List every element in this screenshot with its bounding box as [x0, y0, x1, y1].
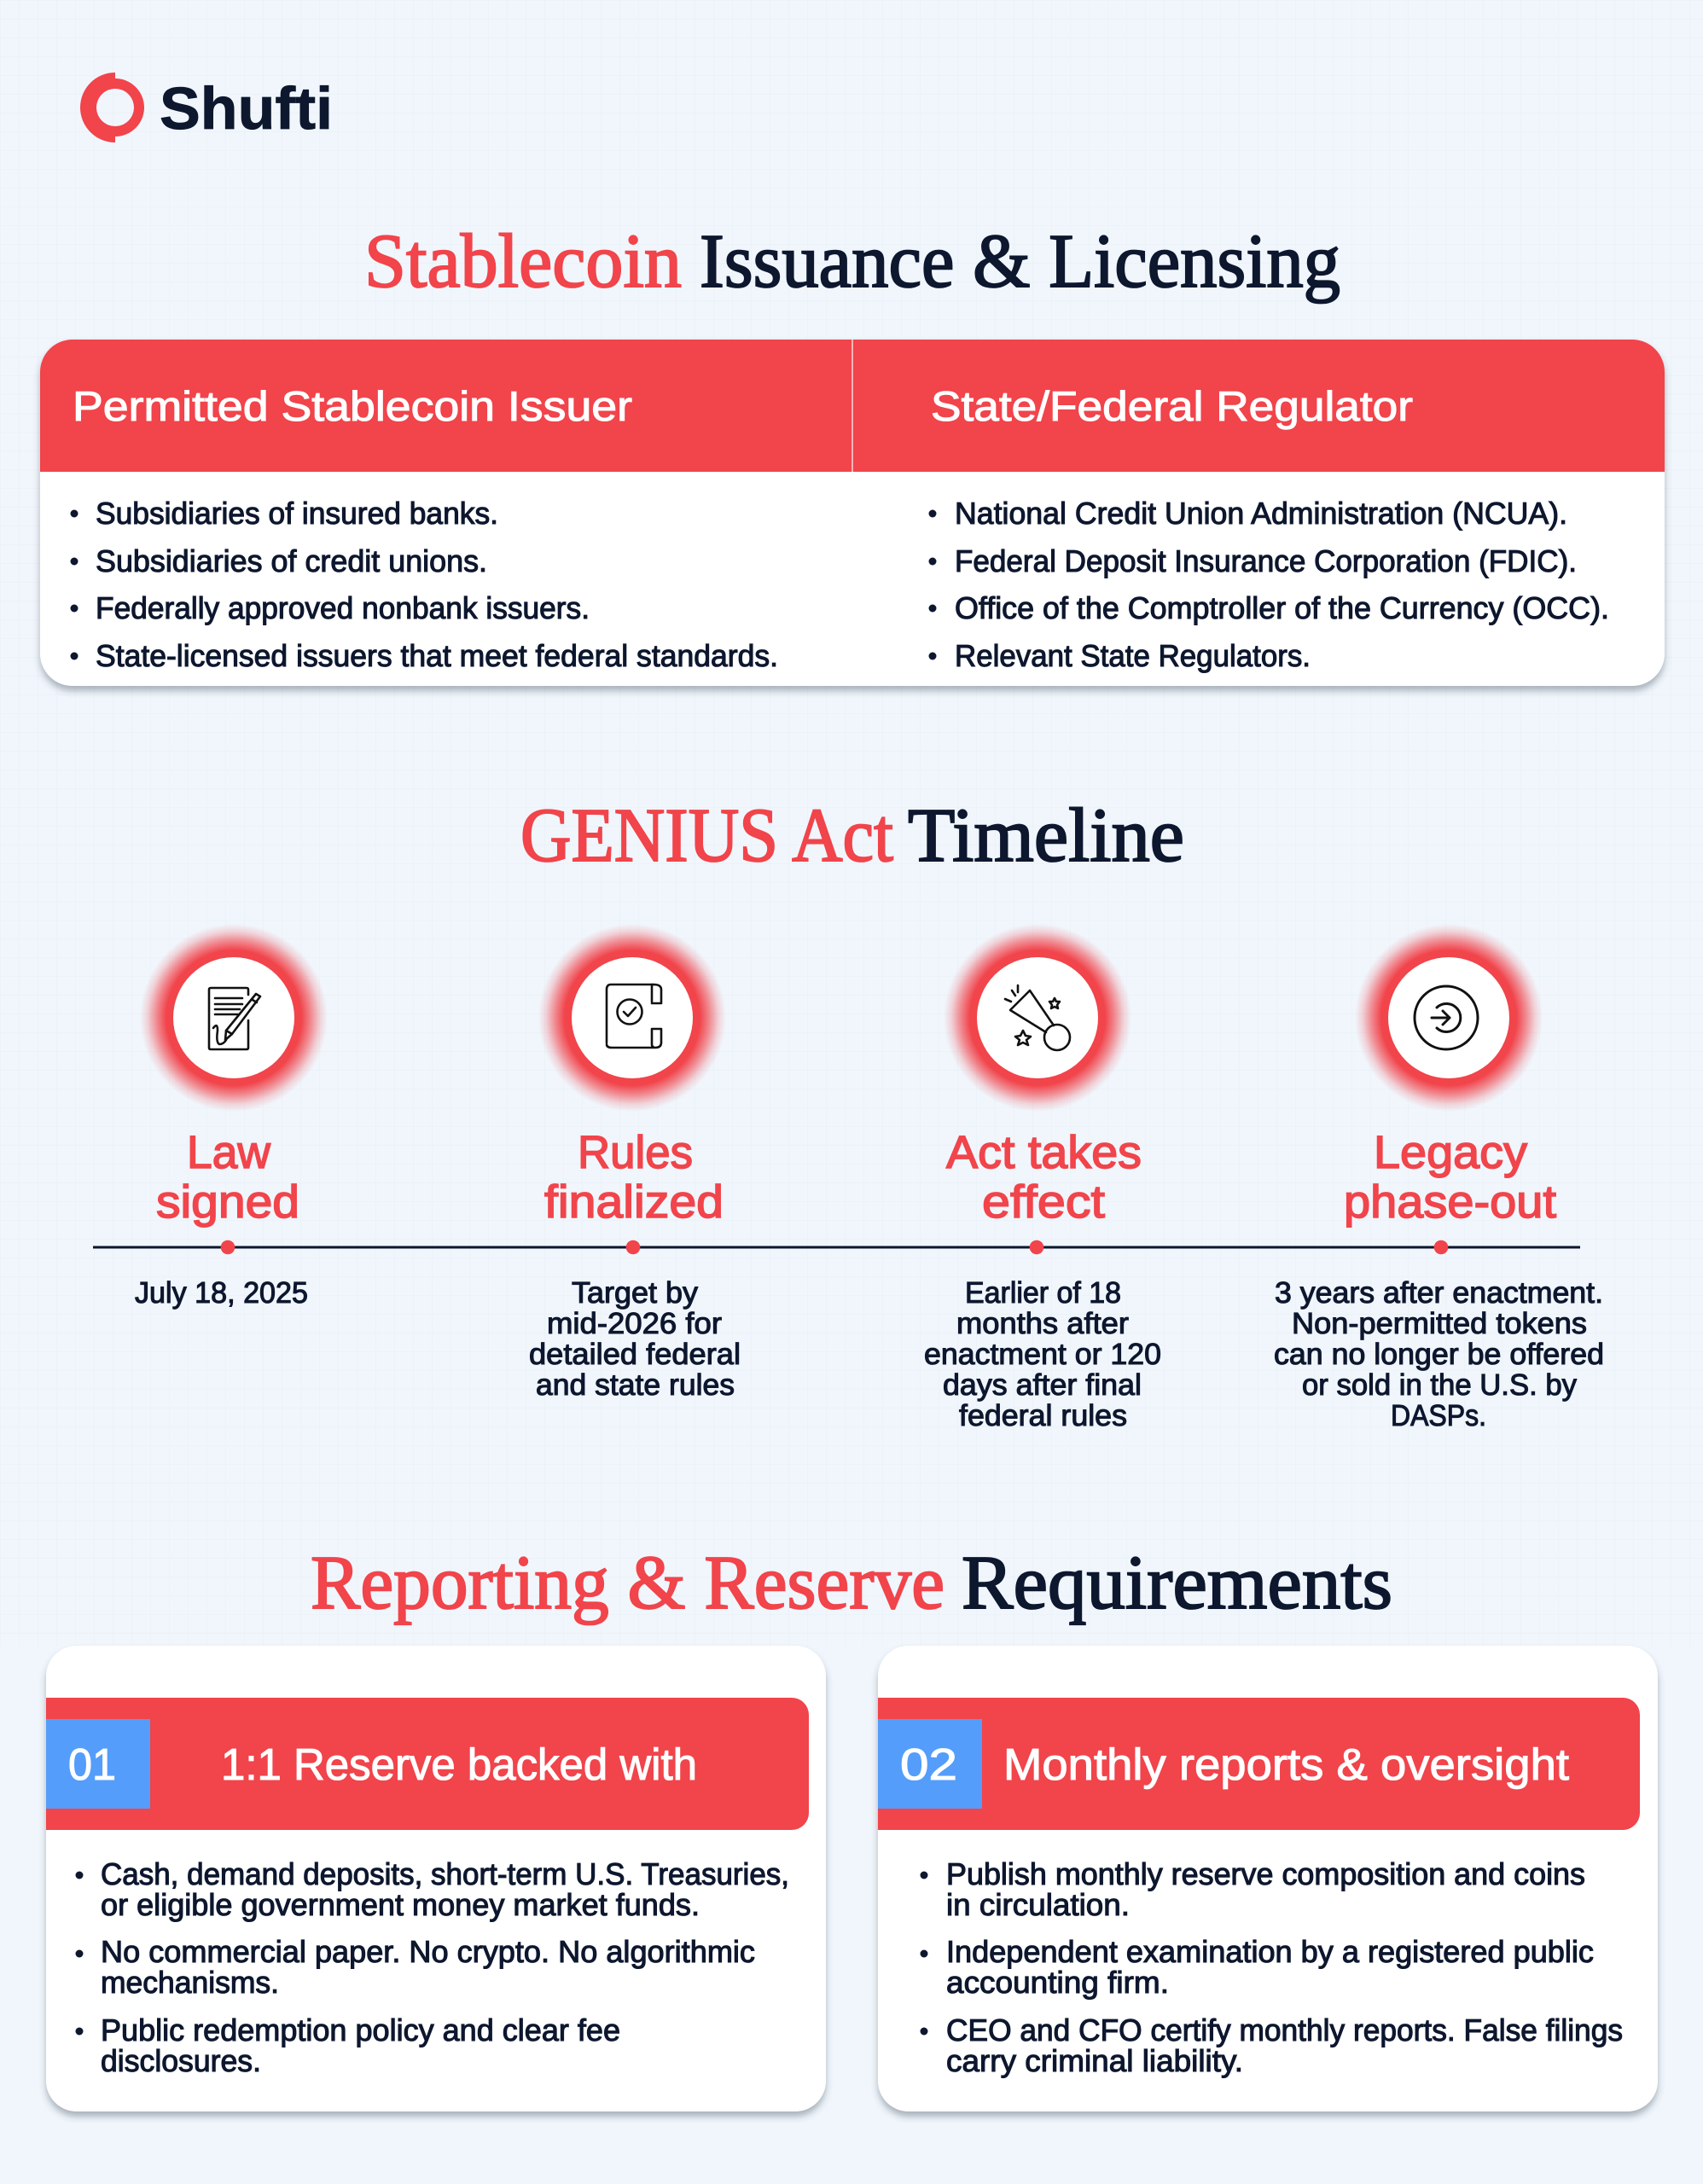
description text: 3 years after enactment. [1275, 1276, 1603, 1310]
list: regulators [928, 496, 1609, 673]
description text: months after [956, 1307, 1129, 1340]
icon: scroll with check [538, 924, 726, 1112]
description text: detailed federal [529, 1338, 741, 1371]
description text: Non-permitted tokens [1292, 1307, 1587, 1340]
heading: Reporting & Reserve Requirements: Reporting & Reserve [311, 1541, 944, 1625]
card header bar [878, 1698, 1640, 1830]
description text [924, 1276, 1161, 1432]
panel: 01 reserve requirements [46, 1646, 826, 2111]
label [544, 1127, 724, 1228]
list: permitted issuers: Subsidiaries of credit unions. [96, 543, 487, 578]
description text: Earlier of 18 [965, 1276, 1121, 1310]
column header: State/Federal Regulator: State/Federal Regulator [931, 384, 1413, 430]
milestone: Act takes effect [924, 924, 1161, 1432]
reports bullet list: CEO and CFO certify monthly reports. False filings [946, 2013, 1623, 2048]
description text: federal rules [959, 1399, 1127, 1432]
description text: or sold in the U.S. by [1302, 1368, 1577, 1402]
description text [529, 1276, 741, 1402]
icon: Shufti ring mark [80, 73, 144, 142]
heading: GENIUS Act Timeline [520, 793, 1184, 878]
column header: Permitted Stablecoin Issuer: Permitted Stablecoin Issuer [73, 384, 632, 430]
number badge 02 [878, 1719, 982, 1809]
number badge 02: 02 [900, 1740, 957, 1790]
reports bullet list: accounting firm. [946, 1965, 1169, 2000]
description text: and state rules [536, 1368, 735, 1402]
label: Law [187, 1127, 271, 1178]
timeline axis with markers [93, 1240, 1580, 1254]
reserve bullet list: or eligible government money market funds. [101, 1887, 700, 1922]
icon: signed document [140, 924, 328, 1112]
description text: Target by [572, 1276, 699, 1310]
list: permitted issuers: Federally approved nonbank issuers. [96, 590, 590, 625]
label: effect [982, 1176, 1105, 1228]
reserve bullet list: Cash, demand deposits, short-term U.S. Treasuries, [101, 1856, 789, 1891]
heading: Reporting & Reserve Requirements: Requirements [962, 1541, 1392, 1625]
description text: enactment or 120 [924, 1338, 1161, 1371]
label: phase-out [1344, 1176, 1556, 1228]
date text: July 18, 2025 [135, 1276, 308, 1310]
reserve bullet list: mechanisms. [101, 1965, 279, 2000]
milestone: Rules finalized [529, 924, 741, 1402]
heading: GENIUS Act Timeline: Timeline [908, 793, 1184, 878]
panel: issuer and regulator table [40, 340, 1665, 686]
label [946, 1127, 1142, 1228]
reserve bullet list: Public redemption policy and clear fee [101, 2013, 620, 2048]
reports bullet list: carry criminal liability. [946, 2043, 1243, 2078]
milestone: Legacy phase-out [1274, 924, 1604, 1432]
reports bullet list: Independent examination by a registered public [946, 1934, 1594, 1969]
reserve bullet list: disclosures. [101, 2043, 261, 2078]
list: regulators: Relevant State Regulators. [955, 638, 1311, 673]
label: finalized [544, 1176, 724, 1228]
list: permitted issuers: Subsidiaries of insured banks. [96, 496, 498, 531]
list: permitted issuers [70, 496, 778, 673]
list: permitted issuers: State-licensed issuers that meet federal standards. [96, 638, 778, 673]
label [1344, 1127, 1556, 1228]
heading: Stablecoin Issuance & Licensing [364, 219, 1340, 304]
list: regulators: National Credit Union Administration (NCUA). [955, 496, 1567, 531]
icon: party popper [944, 924, 1131, 1112]
label [156, 1127, 299, 1228]
reserve bullet list: No commercial paper. No crypto. No algorithmic [101, 1934, 755, 1969]
description text: DASPs. [1391, 1399, 1486, 1432]
label: Rules [578, 1127, 693, 1178]
label: Act takes [946, 1127, 1142, 1178]
heading: Reporting & Reserve Requirements [311, 1541, 1392, 1625]
label: signed [156, 1176, 299, 1228]
reserve bullet list [75, 1856, 789, 2078]
heading: Stablecoin Issuance & Licensing: Issuance & Licensing [700, 219, 1340, 304]
card title: Monthly reports & oversight [1003, 1740, 1570, 1790]
icon: circled entry arrow [1355, 924, 1543, 1112]
card title: 1:1 Reserve backed with [221, 1740, 697, 1790]
number badge 01 [46, 1719, 150, 1809]
logo: Shufti [80, 73, 333, 142]
reports bullet list: Publish monthly reserve composition and coins [946, 1856, 1585, 1891]
timeline [93, 924, 1604, 1432]
panel: 02 monthly reports [878, 1646, 1658, 2111]
number badge 01: 01 [68, 1740, 116, 1790]
wordmark: Shufti [160, 75, 333, 142]
list: regulators: Federal Deposit Insurance Corporation (FDIC). [955, 543, 1577, 578]
milestone: Law signed [135, 924, 328, 1310]
description text: can no longer be offered [1274, 1338, 1604, 1371]
list: regulators: Office of the Comptroller of the Currency (OCC). [955, 590, 1609, 625]
description text [1274, 1276, 1604, 1432]
reports bullet list: in circulation. [946, 1887, 1130, 1922]
label: Legacy [1374, 1127, 1527, 1178]
reports bullet list [920, 1856, 1623, 2078]
card header bar [46, 1698, 809, 1830]
heading: Stablecoin Issuance & Licensing: Stablecoin [364, 219, 682, 304]
heading: GENIUS Act Timeline: GENIUS Act [520, 793, 893, 878]
description text: days after final [943, 1368, 1142, 1402]
description text: mid-2026 for [547, 1307, 722, 1340]
